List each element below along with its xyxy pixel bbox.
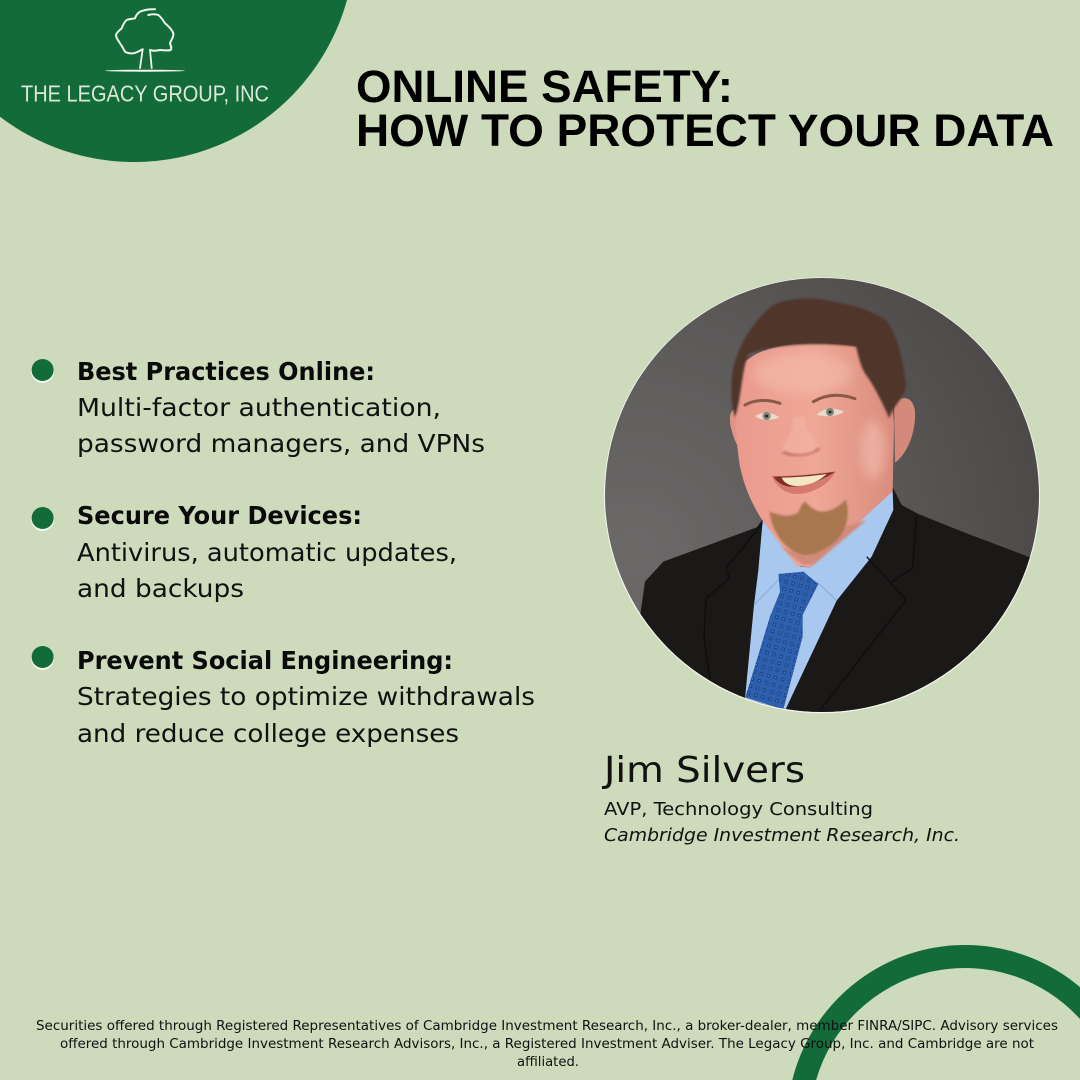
beard — [769, 499, 848, 556]
disclosure footer: Securities offered through Registered Representatives of Cambridge Investment Research, Inc., a broker-dealer, member FINRA/SIPC. Advisory services — [36, 1019, 1058, 1034]
disclosure footer: affiliated. — [517, 1055, 579, 1070]
smile — [772, 471, 836, 494]
nose — [782, 417, 820, 456]
portrait of Jim Silvers — [600, 270, 1050, 720]
brows — [745, 395, 855, 405]
bullet: prevent social engineering — [31, 646, 535, 748]
disclosure footer: offered through Cambridge Investment Research Advisors, Inc., a Registered Investment Adviser. The Legacy Group, Inc. and Cambridge are not — [60, 1037, 1034, 1052]
face and neck — [736, 343, 894, 567]
left ear — [730, 410, 738, 445]
jacket — [640, 488, 1033, 720]
title — [356, 61, 1054, 156]
disclosure footer — [36, 1019, 1058, 1070]
bullet: secure your devices: Secure Your Devices: — [77, 501, 362, 530]
bullet: prevent social engineering: Prevent Social Engineering: — [77, 646, 453, 675]
bullet: secure your devices — [31, 501, 457, 603]
icon: green bullet — [31, 359, 54, 383]
lapels — [704, 515, 917, 710]
icon: green bullet — [31, 646, 54, 670]
bullet: best practices online: Multi-factor authentication, — [77, 393, 441, 422]
decorative ring arc — [792, 945, 1080, 1080]
decorative corner circle with logo — [0, 0, 347, 162]
bullet: secure your devices: and backups — [77, 574, 244, 603]
title: HOW TO PROTECT YOUR DATA — [356, 105, 1054, 156]
tie — [745, 572, 818, 709]
bullet: prevent social engineering: and reduce college expenses — [77, 719, 459, 748]
icon: tree logo — [105, 9, 185, 72]
bullet: best practices online: Best Practices Online: — [77, 357, 375, 386]
icon: green bullet — [31, 507, 54, 531]
speaker name: Jim Silvers — [602, 750, 805, 791]
forehead and cheek highlights — [753, 353, 853, 393]
speaker company: Cambridge Investment Research, Inc. — [604, 825, 960, 846]
neck shadow — [780, 520, 867, 565]
speaker role: AVP, Technology Consulting — [604, 799, 873, 820]
shirt and collar — [745, 491, 893, 711]
bullet: best practices online: password managers, and VPNs — [77, 429, 485, 458]
bullet: best practices online — [31, 357, 485, 458]
right ear — [894, 398, 915, 463]
hair — [731, 298, 906, 418]
title: ONLINE SAFETY: — [356, 61, 733, 112]
eyes — [755, 408, 844, 420]
bullet: secure your devices: Antivirus, automatic updates, — [77, 538, 457, 567]
logo wordmark: THE LEGACY GROUP, INC — [21, 80, 269, 106]
bullet: prevent social engineering: Strategies to optimize withdrawals — [77, 682, 535, 711]
